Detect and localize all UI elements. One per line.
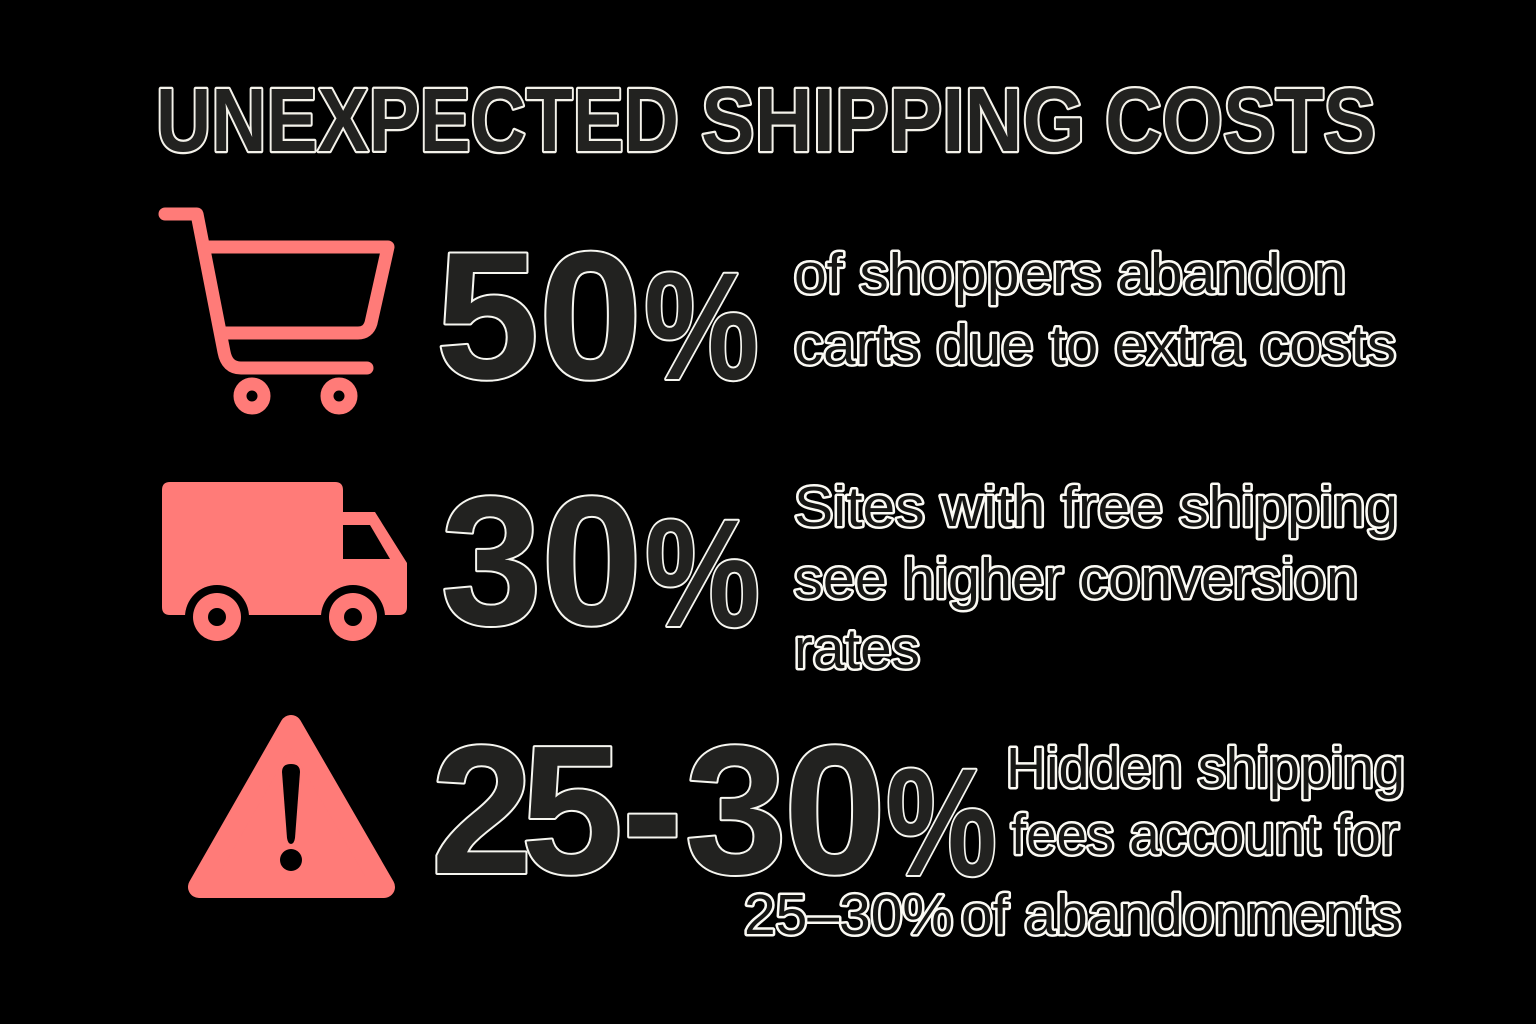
text: free shipping description: see higher conversion [794,547,1358,611]
text: cart abandonment description [794,242,1396,377]
text: hidden fees description: 25–30% [744,883,953,947]
stat: 30 percent [441,458,760,663]
text: hidden fees description: Hidden shipping [1006,736,1405,800]
text: cart abandonment description: carts due to extra costs [794,313,1396,377]
title: SHIPPING [701,71,1085,171]
stat: 25-30 percent: % [886,737,997,908]
stat: 50 percent: 50 [436,215,642,417]
text: free shipping description [794,475,1398,681]
text: hidden fees description [744,736,1405,947]
stat: 50 percent: % [644,241,759,412]
text: free shipping description: rates [794,617,920,681]
row: 30% stat [150,458,1398,681]
title: COSTS [1105,71,1376,171]
icon: shopping cart [165,214,388,408]
stat: 30 percent: % [645,488,760,659]
text: hidden fees description: fees account for [1011,803,1399,867]
stat: 25-30 percent: 25-30 [431,707,886,912]
row: 50% stat [165,214,1396,417]
icon: warning triangle [199,726,384,887]
text: free shipping description: Sites with free shipping [794,475,1398,539]
stat: 30 percent: 30 [441,458,642,663]
title: UNEXPECTED [156,71,679,171]
row: 25-30% stat [199,707,1405,947]
text: cart abandonment description: of shoppers abandon [794,242,1346,306]
icon: delivery truck [150,482,420,649]
title [156,71,1376,171]
text: hidden fees description: of abandonments [961,883,1401,947]
stat: 50 percent [436,215,759,417]
